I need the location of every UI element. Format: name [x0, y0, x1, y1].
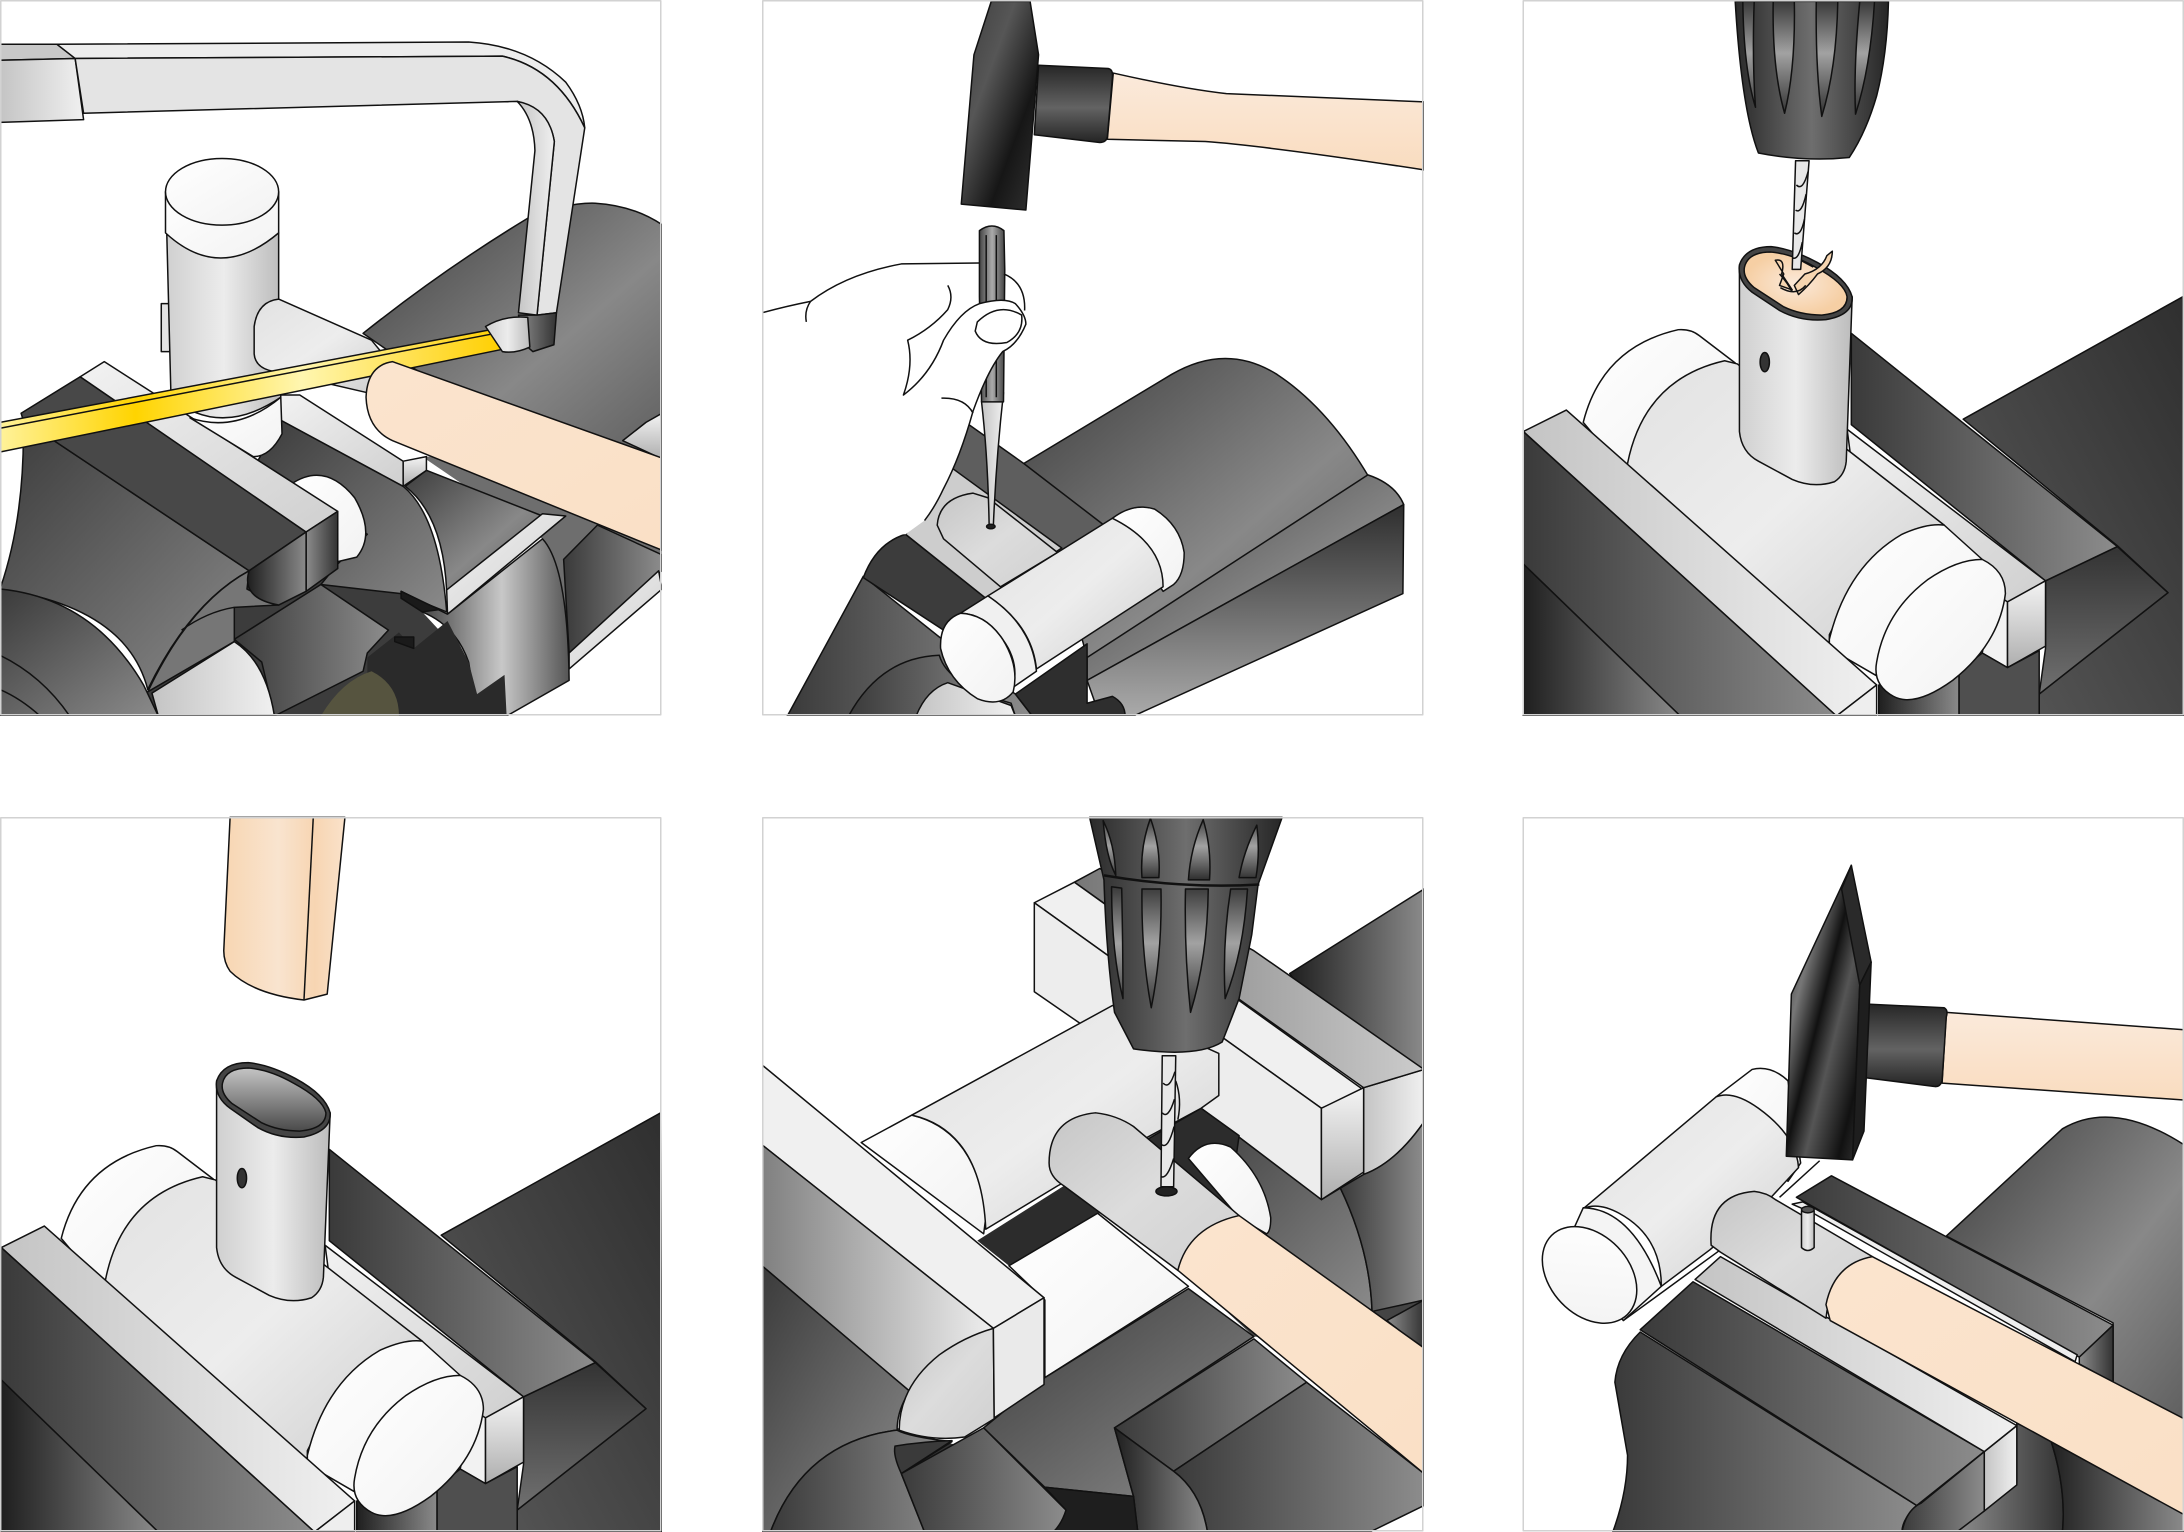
saw frame: [0, 42, 585, 352]
drill bit: [1792, 161, 1809, 269]
saw blade, yellow: [0, 328, 502, 452]
dark vice behind: [1184, 889, 1424, 1350]
vice rear jaw: [363, 203, 662, 461]
vice rim and face: [1015, 475, 1404, 716]
jaw top and strip: [21, 362, 338, 605]
far right vice parts: [564, 413, 662, 669]
vice dark right block: [401, 539, 569, 716]
panel: step 1, sawing the old handle: [0, 41, 662, 716]
hand and thumb outlines: [762, 263, 1026, 534]
hand holding the punch: [762, 263, 1025, 534]
wooden handle: [1178, 1216, 1424, 1474]
oval socket, empty: [216, 1063, 330, 1301]
bottom dark castings: [234, 584, 507, 716]
drill chuck: [1735, 1, 1888, 159]
dark gap and rear white part: [977, 1108, 1271, 1266]
drill chuck: [1090, 817, 1282, 1052]
vice backing under the right side: [422, 457, 662, 653]
front jaw: [762, 1065, 1066, 1532]
hammer with wooden handle: [1786, 865, 2184, 1160]
wooden handle coming down: [224, 817, 345, 1000]
hammer head in vice: [941, 507, 1184, 702]
hammer head with white caps: [161, 158, 282, 457]
vice front body: [1613, 1257, 2184, 1532]
rear jaw block: [1034, 869, 1424, 1200]
panel: step 2, centre punch: [764, 2, 1424, 716]
panel: step 3, drilling into the old handle: [1522, 2, 2184, 716]
panel border 2: [763, 1, 1423, 715]
hammer above punch: [961, 1, 1424, 210]
hammer body: [861, 1006, 1239, 1378]
vice rear dome jaw: [1024, 358, 1374, 658]
centre punch: [979, 226, 1005, 529]
light rear jaw strip: [281, 395, 403, 486]
vice front jaw side: [0, 420, 279, 716]
wooden handle: [1826, 1257, 2184, 1515]
vice front dark body: [787, 534, 1032, 716]
vice and hammer head: [1, 1113, 662, 1532]
panel border 4: [1, 818, 661, 1531]
white rear hammer cap: [291, 475, 366, 562]
panel: step 6, hammering in the pin: [1542, 864, 2184, 1532]
hammer socket around handle: [254, 299, 388, 393]
panel border 5: [763, 818, 1423, 1531]
panel: step 4, new handle: [0, 816, 662, 1532]
vice and hammer head: [1523, 297, 2184, 716]
hammer head in vice: [1525, 1068, 1872, 1343]
pin in hole: [1801, 1206, 1814, 1250]
panel border 3: [1523, 1, 2183, 715]
panel: step 5, drilling through handle: [762, 816, 1424, 1532]
lower dark vice: [897, 1289, 1424, 1532]
vice rear dome: [1946, 1117, 2184, 1430]
centre jaw strips: [906, 425, 1104, 598]
drill bit: [1156, 1056, 1180, 1196]
panel border 1: [1, 1, 661, 715]
oval socket with wood and chips: [1739, 247, 1852, 485]
vice backing under the centre: [148, 564, 477, 716]
rear jaw: [1792, 1176, 2113, 1382]
vice centre plate: [258, 420, 566, 614]
wooden handle: [366, 362, 662, 550]
panel border 6: [1523, 818, 2183, 1531]
